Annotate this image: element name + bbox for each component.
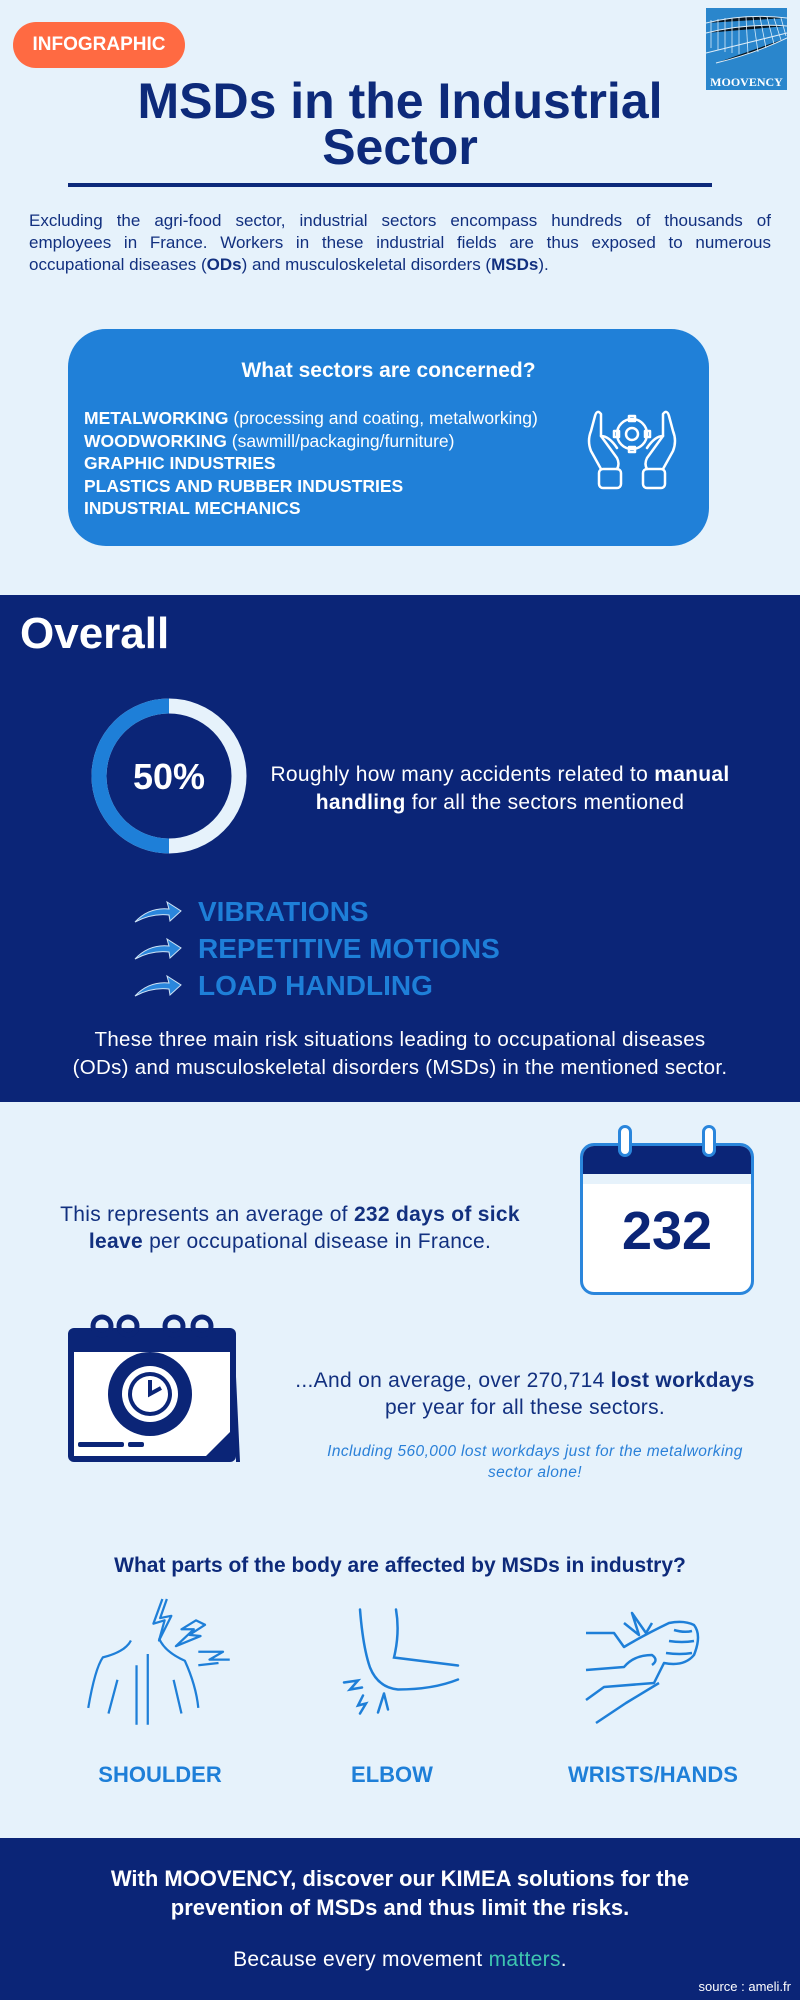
panel: sectors concerned [68,329,709,546]
risk list with arrows: LOAD HANDLING [198,970,433,1001]
text: metalworking note: sector alone! [488,1464,582,1481]
icon: calendar with clock [68,1314,240,1462]
footer panel [0,1838,800,2000]
text: manual handling [270,763,730,814]
sectors list [84,408,538,518]
icon: calendar 232 [580,1125,754,1295]
sectors list: INDUSTRIAL MECHANICS [84,498,300,518]
logo: moovency [706,8,787,90]
text: metalworking note: Including 560,000 lost workdays just for the metalworking [327,1443,743,1460]
sectors heading: What sectors are concerned? [241,359,536,382]
text: 232 days [60,1203,520,1253]
icon: elbow [342,1608,460,1715]
title: Sector [322,119,478,175]
text: three risk situations [73,1028,727,1079]
title [137,73,663,175]
footer tagline: Because every movement matters. [233,1948,567,1971]
icon: wrist/hand [585,1612,700,1724]
sectors list: METALWORKING (processing and coating, metalworking) [84,408,538,428]
text: lost workdays: ...And on average, over 270,714 lost workdays [295,1369,755,1392]
badge: infographic: INFOGRAPHIC [32,34,166,55]
risk list with arrows: VIBRATIONS [198,896,369,927]
text: 232 days: This represents an average of 232 days of sick [60,1203,520,1226]
intro paragraph: occupational diseases (ODs) and musculoskeletal disorders (MSDs). [29,255,549,274]
footer call to action: prevention of MSDs and thus limit the risks. [171,1895,629,1920]
sectors list: GRAPHIC INDUSTRIES [84,453,276,473]
title: MSDs in the Industrial [137,73,663,129]
risk list with arrows: REPETITIVE MOTIONS [198,933,500,964]
footer call to action [110,1866,689,1920]
text: three risk situations: These three main risk situations leading to occupational diseases [95,1028,705,1051]
intro paragraph: employees in France. Workers in these industrial fields are thus exposed to numerous [29,233,771,252]
badge: infographic [13,22,185,68]
text: metalworking note [327,1443,743,1481]
text: manual handling: handling for all the sectors mentioned [316,791,684,814]
intro paragraph: Excluding the agri-food sector, industrial sectors encompass hundreds of thousands of [29,211,771,230]
donut chart 50% [92,698,246,854]
underline [68,183,712,187]
text: lost workdays: per year for all these sectors. [385,1396,665,1419]
text: manual handling: Roughly how many accidents related to manual [270,763,730,786]
logo: moovency: MOOVENCY [710,75,783,89]
risk list with arrows [134,896,500,1001]
panel: overall [0,595,800,1102]
text: three risk situations: (ODs) and musculoskeletal disorders (MSDs) in the mentioned sector. [73,1056,727,1079]
donut chart 50%: 50% [133,756,205,797]
label: shoulder: SHOULDER [98,1762,222,1787]
heading: overall: Overall [20,609,169,658]
sectors list: PLASTICS AND RUBBER INDUSTRIES [84,476,403,496]
footer call to action: With MOOVENCY, discover our KIMEA solutions for the [111,1866,689,1891]
icon: hands with gear [588,410,676,490]
source: source : ameli.fr [699,1979,791,1994]
text: lost workdays [295,1369,755,1419]
text: 232 days: leave per occupational disease in France. [89,1230,491,1253]
label: wrists/hands: WRISTS/HANDS [568,1762,738,1787]
sectors list: WOODWORKING (sawmill/packaging/furniture) [84,430,454,450]
intro paragraph [29,211,771,274]
heading: body parts: What parts of the body are affected by MSDs in industry? [114,1554,686,1577]
label: elbow: ELBOW [351,1762,433,1787]
icon: shoulder [87,1598,230,1725]
icon: calendar 232: 232 [622,1201,712,1261]
